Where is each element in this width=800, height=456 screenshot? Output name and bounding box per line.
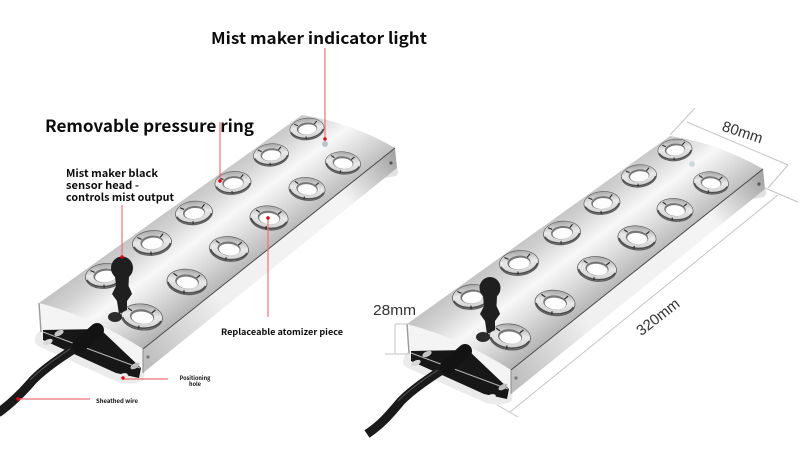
sheathed wire line	[16, 397, 90, 401]
dimension: length: 320mm	[633, 295, 683, 340]
heading: pressure ring: Removable pressure ring	[45, 113, 254, 137]
heading: indicator light: Mist maker indicator light	[211, 25, 427, 49]
panel: annotated mist maker	[0, 25, 427, 413]
front opening	[407, 324, 511, 401]
positioning hole line	[121, 376, 168, 380]
base plate	[403, 189, 766, 405]
label: positioning hole: hole	[189, 380, 201, 388]
black sensor head	[108, 256, 133, 322]
label: positioning hole: Positioning	[180, 374, 211, 382]
pressure ring line	[218, 122, 222, 183]
indicator light	[322, 141, 328, 147]
label: sensor head: sensor head -	[66, 178, 139, 193]
power cable	[0, 330, 97, 413]
sensor head line	[120, 205, 124, 259]
dimension lines	[385, 108, 798, 417]
metal body	[39, 115, 397, 373]
panel: dimensioned mist maker	[367, 108, 798, 434]
dimension: width: 80mm	[720, 118, 765, 147]
metal body	[407, 136, 765, 394]
indicator line	[323, 48, 327, 141]
atomizer rings	[451, 137, 730, 353]
power cable	[367, 351, 465, 434]
front opening	[39, 303, 143, 380]
label: sensor head: controls mist output	[66, 190, 175, 205]
label: atomizer piece: Replaceable atomizer piece	[221, 326, 343, 338]
label: sheathed wire: Sheathed wire	[96, 397, 138, 405]
base plate	[35, 168, 398, 384]
atomizer rings	[84, 116, 362, 333]
dimension: height: 28mm	[373, 302, 416, 319]
black sensor head	[476, 277, 500, 342]
label: sensor head: Mist maker black	[66, 166, 159, 181]
indicator light	[689, 161, 695, 167]
atomizer line	[266, 216, 270, 317]
